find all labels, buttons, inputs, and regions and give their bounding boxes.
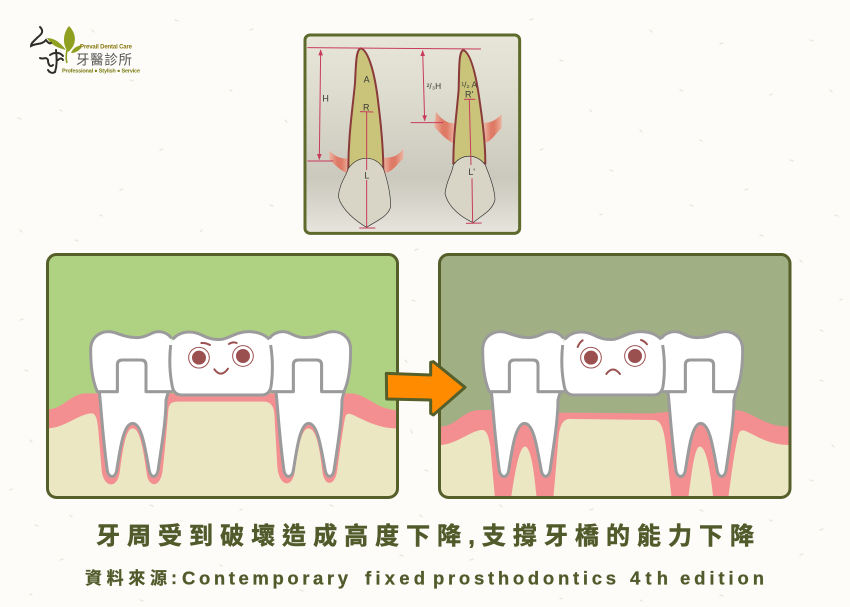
logo: leaf sprout xyxy=(47,26,82,63)
diagram: labels: A xyxy=(364,75,370,85)
logo: clinic name: Prevail Dental Care xyxy=(80,44,133,50)
diagram: reduced height tooth xyxy=(434,50,502,223)
diagram: measurement lines xyxy=(307,48,482,228)
smile face xyxy=(201,342,237,374)
logo: 牙醫診所 xyxy=(76,52,132,68)
bone xyxy=(47,402,397,498)
panel: radiograph diagram photo xyxy=(305,35,520,233)
diagram: labels: H xyxy=(322,93,329,103)
source line: fixed xyxy=(365,568,425,588)
diagram: labels: L' xyxy=(468,167,475,177)
panel: bone loss bridge xyxy=(439,254,791,498)
gum xyxy=(439,410,789,498)
source line: edition xyxy=(680,568,764,588)
diagram: labels: ²/₃H xyxy=(427,81,441,91)
source line: 資料來源 xyxy=(85,568,167,588)
logo xyxy=(31,26,140,74)
headline: 牙周受到破壞造成高度下降,支撐牙橋的能力下降 xyxy=(96,523,754,550)
diagram: labels: R' xyxy=(465,90,473,100)
diagram: labels: ¹/₂ A xyxy=(461,80,477,90)
panel: healthy bridge xyxy=(47,254,398,498)
diagram: full height tooth xyxy=(329,48,403,227)
diagram: labels xyxy=(322,75,477,180)
source line xyxy=(85,568,764,588)
logo: Professional ● Stylish ● Service xyxy=(62,68,140,74)
source line: prosthodontics xyxy=(433,568,616,588)
bridge xyxy=(483,332,743,476)
diagram: labels: L xyxy=(364,170,369,180)
source line: 4th xyxy=(630,568,668,588)
source line: Contemporary xyxy=(182,568,349,588)
diagram: labels: R xyxy=(363,102,370,112)
source line: : xyxy=(171,568,177,588)
gum xyxy=(49,393,396,484)
sad face xyxy=(578,340,647,374)
arrow xyxy=(386,362,465,415)
bridge xyxy=(91,332,351,476)
bone xyxy=(439,419,789,498)
logo: black calligraphic vine xyxy=(31,27,63,73)
